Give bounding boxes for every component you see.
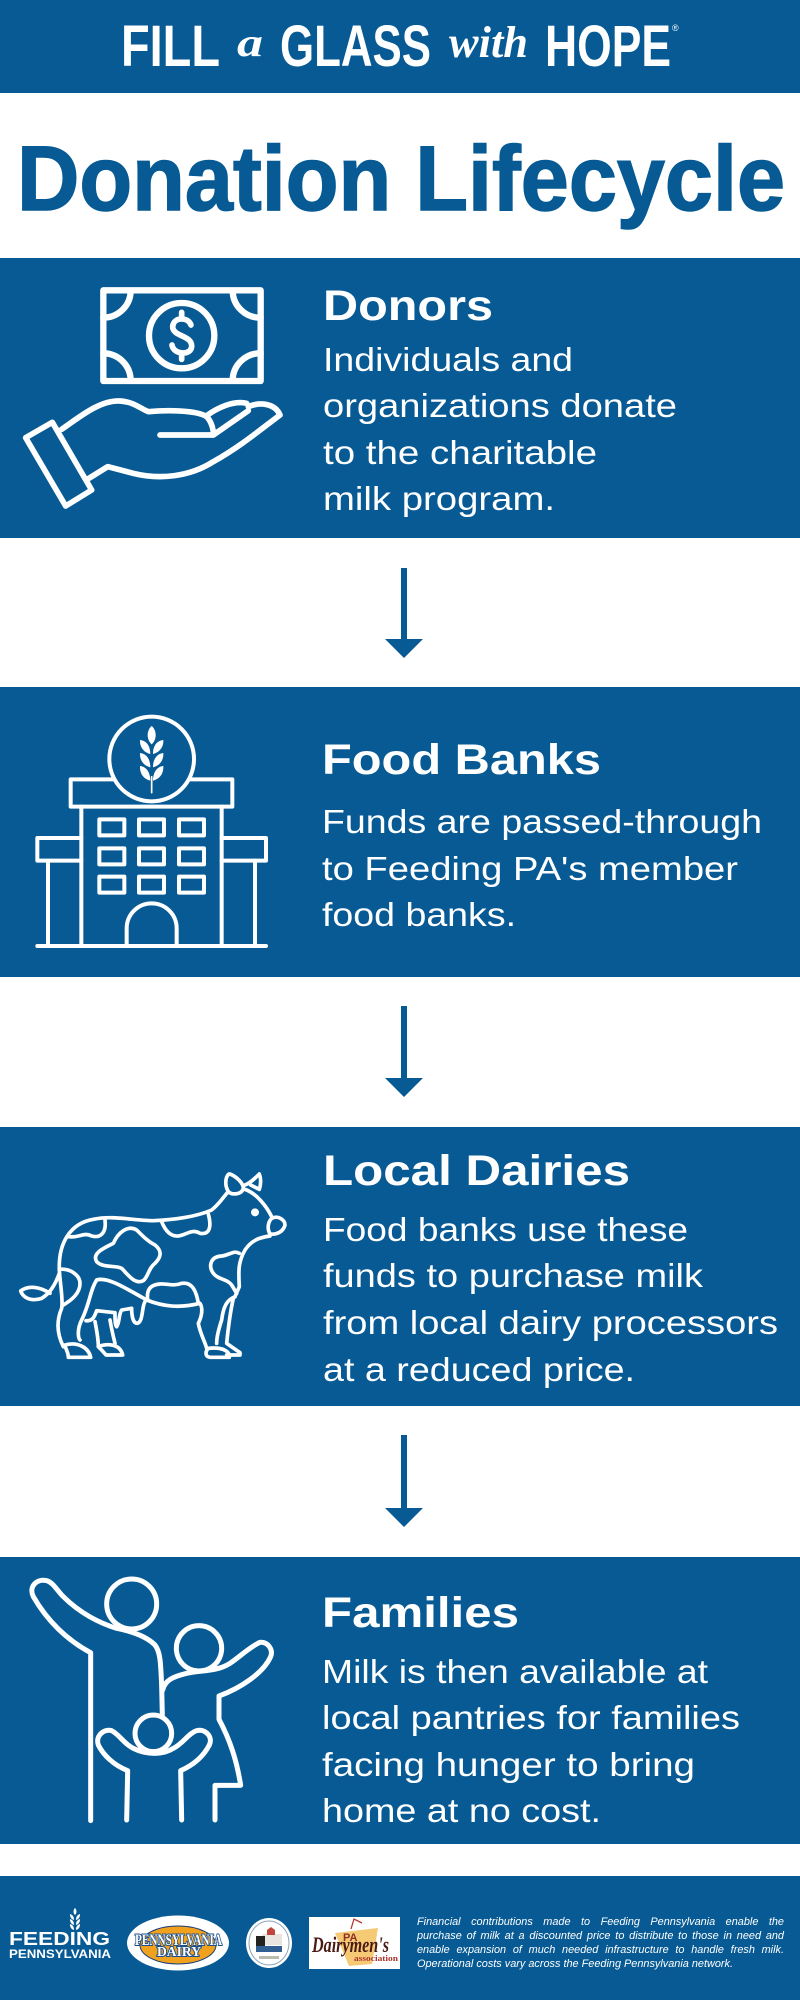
text: donors body	[323, 341, 677, 517]
text: donors body: Individuals and	[323, 341, 573, 378]
arrow 3	[385, 1435, 423, 1527]
text: local dairies body: from local dairy processors	[323, 1304, 778, 1341]
logo: Pennsylvania Dairy	[127, 1916, 229, 1970]
heading: local dairies: Local Dairies	[323, 1147, 630, 1195]
text: local dairies body: funds to purchase milk	[323, 1257, 704, 1294]
logo: Feeding Pennsylvania	[9, 1908, 111, 1961]
header band: Fill a Glass with Hope: ®	[672, 23, 679, 33]
text: local dairies body: at a reduced price.	[323, 1351, 635, 1388]
logo: Feeding Pennsylvania: PENNSYLVANIA	[9, 1949, 111, 1961]
icon: food bank building	[37, 717, 266, 946]
footer disclaimer text	[416, 1916, 784, 1970]
text: local dairies body	[323, 1211, 778, 1388]
header band: Fill a Glass with Hope: HOPE	[545, 14, 671, 79]
panel: food banks	[0, 687, 800, 977]
text: families body: home at no cost.	[322, 1792, 601, 1829]
logo: Pennsylvania Dairy: DAIRY	[157, 1945, 201, 1960]
header band: Fill a Glass with Hope: FILL	[121, 14, 220, 79]
logo: PA Dairymen's Association: PA	[343, 1932, 358, 1944]
footer disclaimer text: purchase of milk at a discounted price to distribute to those in need and	[417, 1930, 784, 1942]
text: food banks body: to Feeding PA's member	[322, 850, 738, 887]
text: donors body: organizations donate	[323, 387, 677, 424]
icon: cow	[21, 1174, 285, 1357]
logo: Feeding Pennsylvania: FEEDING	[9, 1929, 110, 1949]
icon: family	[32, 1579, 271, 1821]
heading: donors: Donors	[323, 282, 493, 330]
text: local dairies body: Food banks use these	[323, 1211, 688, 1248]
panel: local dairies	[0, 1127, 800, 1406]
header band: Fill a Glass with Hope	[0, 0, 800, 93]
logo: PA Dairymen's Association: association	[354, 1954, 399, 1963]
footer disclaimer text: Operational costs vary across the Feeding Pennsylvania network.	[417, 1958, 733, 1970]
logo: PA Dairymen's Association	[309, 1917, 400, 1969]
header band: Fill a Glass with Hope: a	[237, 20, 263, 65]
text: donors body: to the charitable	[323, 434, 597, 471]
text: families body: facing hunger to bring	[322, 1746, 695, 1783]
header band: Fill a Glass with Hope: with	[449, 18, 528, 67]
text: food banks body: Funds are passed-through	[322, 803, 762, 840]
logo: dairy seal	[246, 1918, 292, 1968]
heading: food banks: Food Banks	[322, 736, 601, 784]
logo: PA Dairymen's Association: Dairymen's	[311, 1932, 389, 1957]
logo: Pennsylvania Dairy: PENNSYLVANIA	[135, 1932, 222, 1949]
text: food banks body: food banks.	[322, 896, 516, 933]
text: families body: local pantries for families	[322, 1699, 740, 1736]
arrow 1	[385, 568, 423, 658]
text: families body: Milk is then available at	[322, 1653, 708, 1690]
icon: hand holding money	[26, 290, 280, 506]
header band: Fill a Glass with Hope: GLASS	[280, 14, 431, 79]
heading: families: Families	[322, 1589, 519, 1637]
footer band with logos	[0, 1876, 800, 2000]
footer disclaimer text: enable expansion of much needed infrastructure to handle fresh milk.	[417, 1944, 784, 1956]
text: donors body: milk program.	[323, 480, 555, 517]
footer disclaimer text: Financial contributions made to Feeding Pennsylvania enable the	[417, 1916, 784, 1928]
text: food banks body	[322, 803, 762, 933]
panel: families	[0, 1557, 800, 1844]
text: families body	[322, 1653, 740, 1829]
arrow 2	[385, 1006, 423, 1097]
panel: donors	[0, 258, 800, 538]
